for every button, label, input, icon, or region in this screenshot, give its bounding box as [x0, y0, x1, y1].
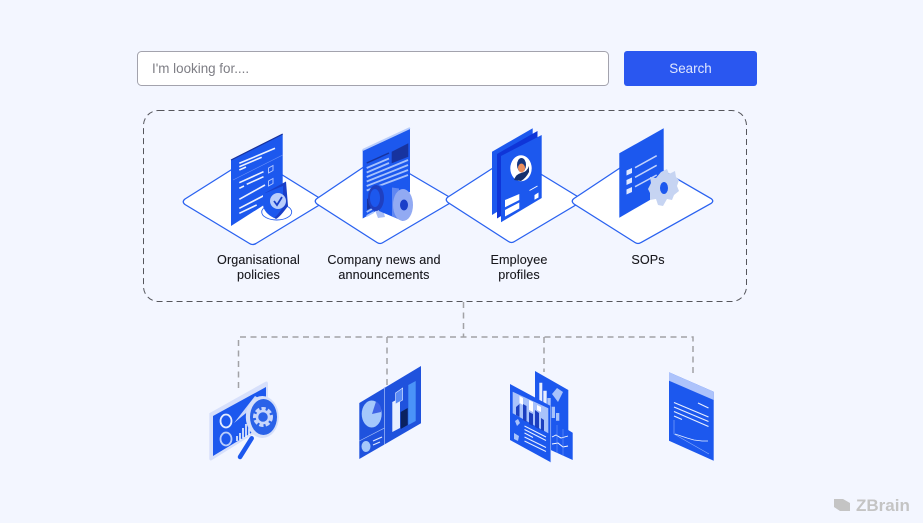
- platform diamond: [183, 157, 322, 244]
- item: Organisational policies: policies: [237, 268, 280, 282]
- icon: dashboard with magnifier: [209, 382, 279, 460]
- item: SOPs: [572, 128, 713, 267]
- item: Organisational policies: [183, 134, 322, 282]
- dashed connectors: [238, 302, 693, 388]
- icon: report sheets with graphs: [510, 371, 573, 462]
- platform diamond: [446, 157, 582, 242]
- icon: policy document with shield: [231, 134, 292, 226]
- label: Organisational: [217, 253, 300, 267]
- logo: ZBrain: ZBrain: [856, 496, 910, 515]
- label: Employee: [491, 253, 547, 267]
- search button: Search: [669, 61, 712, 76]
- dashed panel: knowledge sources: [144, 110, 746, 302]
- label: SOPs: [631, 253, 665, 267]
- search button: [624, 51, 757, 86]
- icon: report document with line chart: [669, 372, 714, 461]
- icon: newspaper with megaphone: [363, 128, 413, 221]
- icon: SOP document with gear: [619, 128, 679, 218]
- icon: employee profile cards: [492, 128, 542, 222]
- search input: [138, 52, 608, 86]
- search input: I'm looking for....: [152, 61, 249, 76]
- item: Company news and announcements: announcements: [338, 268, 430, 282]
- platform diamond: [572, 157, 713, 244]
- platform diamond: [315, 157, 452, 244]
- item: Company news and announcements: [315, 128, 452, 282]
- label: Company news and: [327, 253, 441, 267]
- icon: analytics charts panel: [359, 366, 421, 459]
- item: Employee profiles: [446, 128, 582, 282]
- item: Employee profiles: profiles: [498, 268, 540, 282]
